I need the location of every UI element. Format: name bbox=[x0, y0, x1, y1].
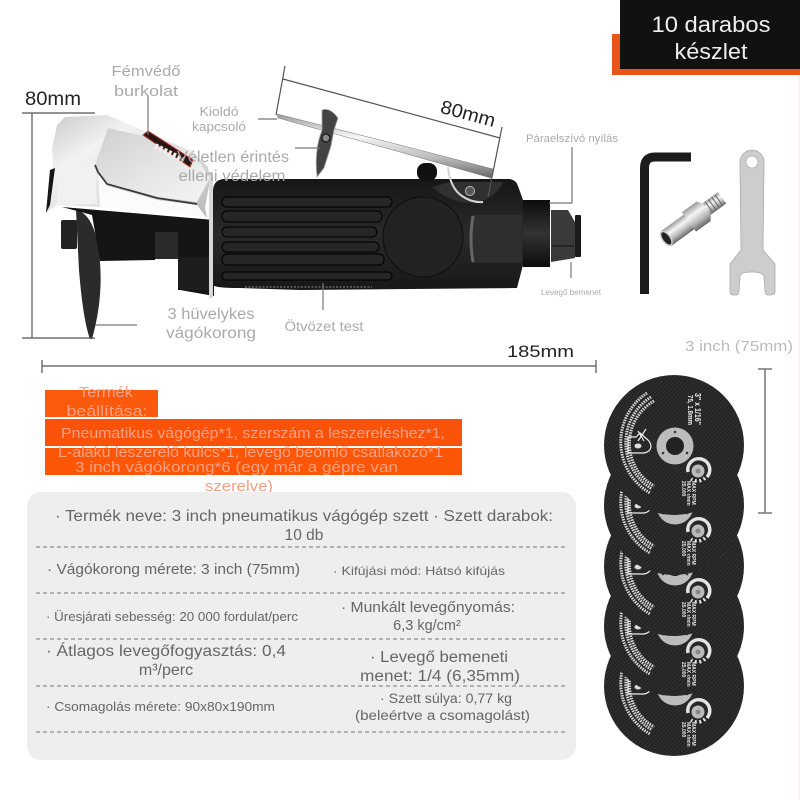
panel: product configuration: 3 inch vágókorong*6 (egy már a gépre van bbox=[75, 459, 398, 476]
label: Fémvédő burkolat: Fémvédő bbox=[112, 63, 180, 80]
spec: package size: · Csomagolás mérete: 90x80x190mm bbox=[46, 700, 275, 714]
spec: product name and pieces: 10 db bbox=[285, 527, 323, 544]
spec: air consumption: · Átlagos levegőfogyasztás: 0,4 bbox=[46, 641, 286, 660]
spec: air inlet thread: menet: 1/4 (6,35mm) bbox=[360, 668, 520, 685]
spec: product name and pieces: · Termék neve: 3 inch pneumatikus vágógép szett · Szett darabok: bbox=[55, 508, 553, 525]
badge: 10 darabos készlet: 10 darabos bbox=[652, 12, 770, 37]
rear neck bbox=[523, 200, 550, 267]
dimension: 80mm lever: 80mm bbox=[438, 97, 498, 132]
disc 5: MAX RPM bbox=[690, 722, 696, 746]
label: Ötvözet test: Ötvözet test bbox=[284, 319, 364, 334]
label: 3 hüvelykes vágókorong: vágókorong bbox=[166, 325, 256, 342]
metal guard bbox=[46, 115, 210, 218]
trigger lever bbox=[277, 114, 493, 178]
spec: air inlet thread: · Levegő bemeneti bbox=[370, 649, 508, 666]
disc 3 bbox=[604, 496, 744, 636]
label: Páraelszívó nyílás bbox=[526, 133, 619, 203]
disc 3: MAX RPM bbox=[690, 602, 696, 626]
disc 4: MAX r/min bbox=[685, 662, 691, 687]
panel: product configuration bbox=[45, 384, 462, 495]
label: 3 hüvelykes vágókorong: 3 hüvelykes bbox=[168, 306, 255, 323]
panel: product configuration: L-alakú leszerelő kulcs*1, levegő beömlő csatlakozó*1 bbox=[58, 445, 443, 461]
round recess bbox=[383, 197, 463, 277]
dimension: 185mm length bbox=[42, 342, 596, 373]
disc 1 bbox=[604, 375, 744, 515]
spec: working pressure: · Munkált levegőnyomás: bbox=[341, 600, 515, 616]
label: Véletlen érintés elleni védelem: elleni védelem bbox=[178, 168, 286, 185]
guard label bbox=[143, 131, 193, 167]
dimension: 3 inch disc bbox=[685, 338, 793, 513]
disc 5: MAX r/min bbox=[685, 722, 691, 747]
disc 2: MAX r/min bbox=[685, 541, 691, 566]
grip body bbox=[213, 179, 523, 290]
panel: product configuration: beállítása: bbox=[66, 403, 148, 420]
collar flange bbox=[209, 172, 213, 298]
cut-off disc blade bbox=[76, 210, 101, 339]
label: Véletlen érintés elleni védelem bbox=[177, 148, 320, 185]
label: 3 hüvelykes vágókorong bbox=[95, 306, 256, 342]
spindle and head bbox=[62, 207, 214, 296]
disc 4 bbox=[604, 556, 744, 696]
disc 4: 25,000 bbox=[680, 662, 686, 678]
label: Kioldó kapcsoló: kapcsoló bbox=[192, 120, 246, 134]
panel: specifications bbox=[27, 492, 576, 760]
panel: product configuration: szerelve) bbox=[205, 478, 273, 495]
dimension: 80mm lever bbox=[276, 66, 502, 197]
label: Ötvözet test bbox=[284, 283, 364, 334]
label: Levegő bemenet: Levegő bemenet bbox=[541, 287, 602, 297]
disc 5: 25,000 bbox=[680, 722, 686, 738]
label: Fémvédő burkolat: burkolat bbox=[114, 83, 179, 100]
spec: disc size: · Vágókorong mérete: 3 inch (75mm) bbox=[47, 562, 300, 578]
air inlet nut bbox=[551, 210, 575, 262]
disc 2: 25,000 bbox=[680, 541, 686, 557]
pneumatic cutting tool bbox=[46, 109, 581, 339]
spec: air consumption bbox=[46, 641, 286, 679]
spec: idle speed: · Üresjárati sebesség: 20 000 fordulat/perc bbox=[46, 610, 298, 624]
spec: working pressure bbox=[341, 600, 515, 634]
lever hinge bbox=[432, 182, 503, 203]
disc 5 bbox=[604, 616, 744, 756]
badge: 10 darabos készlet: készlet bbox=[674, 39, 748, 64]
spec: exhaust mode: · Kifújási mód: Hátsó kifújás bbox=[333, 564, 505, 578]
disc 1: MAX r/min bbox=[685, 481, 691, 506]
label: Véletlen érintés elleni védelem: Véletlen érintés bbox=[177, 149, 289, 166]
icon: air inlet connector bbox=[656, 188, 729, 250]
dimension: 3 inch disc: 3 inch (75mm) bbox=[685, 338, 793, 355]
label: Fémvédő burkolat bbox=[112, 63, 180, 135]
disc 1: 25,000 bbox=[680, 481, 686, 497]
disc 2 bbox=[604, 435, 744, 575]
disc 1: 3" x 1/16" bbox=[693, 393, 702, 425]
grip grooves bbox=[222, 197, 392, 280]
dimension: 80mm height: 80mm bbox=[25, 89, 81, 110]
panel: product configuration: Pneumatikus vágógép*1, szerszám a leszereléshez*1, bbox=[61, 426, 445, 442]
disc 1: 75, 1.8mm bbox=[686, 395, 695, 425]
badge: 10 darabos készlet bbox=[612, 0, 800, 75]
disc 3: MAX r/min bbox=[685, 602, 691, 627]
spec: set weight: (beleértve a csomagolást) bbox=[355, 708, 530, 723]
label: Kioldó kapcsoló: Kioldó bbox=[200, 105, 239, 119]
spec: air consumption: m³/perc bbox=[139, 662, 193, 679]
disc 3: 25,000 bbox=[680, 602, 686, 618]
hex rear section bbox=[472, 215, 522, 263]
spec: air inlet thread bbox=[360, 649, 520, 685]
spec: set weight bbox=[355, 691, 530, 723]
panel: product configuration: Termék bbox=[79, 384, 134, 401]
disc 4: MAX RPM bbox=[690, 662, 696, 686]
disc 2: MAX RPM bbox=[690, 541, 696, 565]
icon: L-shaped hex key bbox=[644, 157, 691, 294]
icon: flat spanner bbox=[730, 150, 775, 295]
disc 1: MAX RPM bbox=[690, 481, 696, 505]
label: Kioldó kapcsoló bbox=[192, 105, 277, 134]
spec: product name and pieces bbox=[55, 508, 553, 544]
dimension: 80mm height bbox=[22, 89, 95, 338]
dimension: 185mm length: 185mm bbox=[507, 342, 574, 361]
label: Levegő bemenet bbox=[541, 262, 602, 297]
label: Páraelszívó nyílás: Páraelszívó nyílás bbox=[526, 133, 619, 145]
lock button bbox=[417, 163, 437, 181]
spec: working pressure: 6,3 kg/cm² bbox=[393, 618, 461, 634]
cutting discs stack bbox=[604, 375, 744, 756]
spec: set weight: · Szett súlya: 0,77 kg bbox=[380, 691, 512, 706]
safety catch bbox=[316, 109, 338, 177]
